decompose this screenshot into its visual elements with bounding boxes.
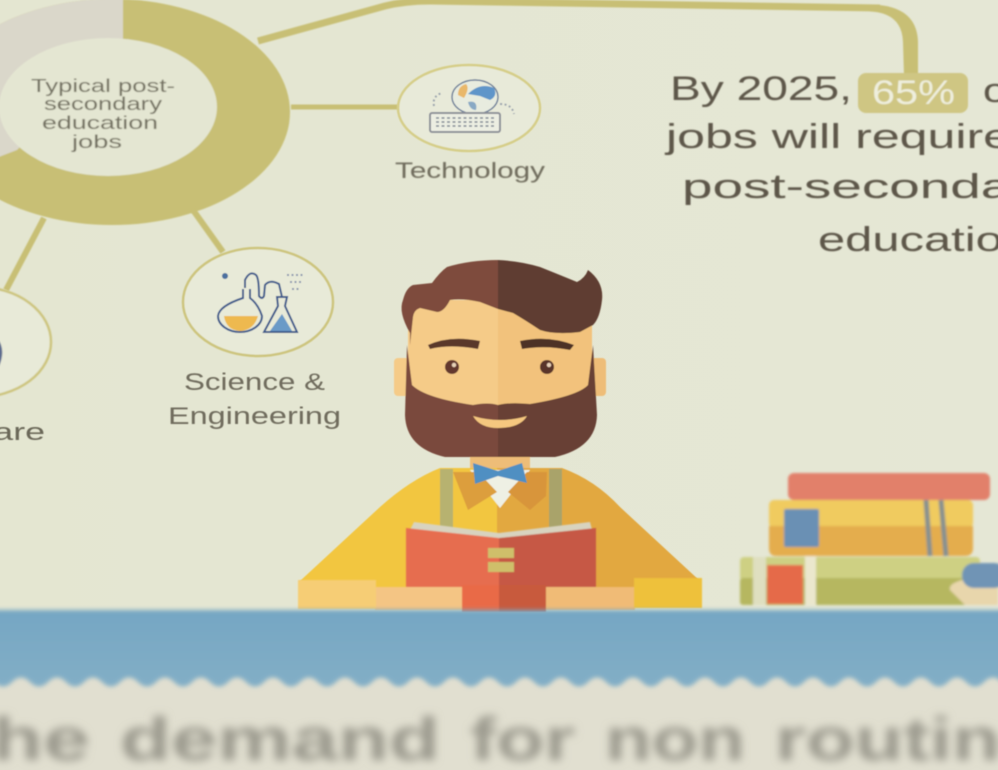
donut chart	[0, 0, 290, 225]
icon: science and engineering	[183, 248, 333, 356]
book spine	[462, 585, 499, 612]
label: technology: Technology	[395, 158, 545, 183]
donut label	[31, 76, 175, 152]
keyboard	[430, 113, 500, 132]
beard left	[405, 345, 498, 457]
neck	[470, 445, 530, 475]
beard right	[498, 345, 597, 457]
red book	[788, 473, 990, 500]
shirt	[470, 470, 530, 508]
hands	[375, 587, 470, 610]
label: science and engineering: Engineering	[168, 403, 341, 430]
eyes	[445, 360, 459, 374]
lower band	[0, 670, 998, 770]
open book	[298, 522, 702, 612]
donut label: jobs	[70, 132, 122, 152]
heading	[0, 706, 998, 770]
statistic text: By 2025,	[670, 70, 852, 108]
donut label: secondary	[44, 94, 162, 114]
grey donut segment	[0, 0, 123, 168]
hair left	[402, 260, 498, 345]
face	[408, 300, 592, 445]
character: bearded man reading	[300, 260, 700, 606]
mouth	[473, 416, 527, 428]
highlight pill	[858, 73, 968, 113]
bow tie	[473, 463, 527, 484]
icon: healthcare, partially cropped	[0, 287, 51, 397]
statistic text: 65%	[872, 74, 955, 112]
globe	[452, 80, 498, 114]
donut label: education	[42, 113, 158, 133]
label: science and engineering	[168, 369, 341, 430]
blue banner	[0, 610, 998, 686]
small blue book	[950, 580, 998, 605]
suspenders	[440, 469, 453, 531]
statistic text: education	[818, 221, 998, 259]
statistic text: post-secondary	[682, 168, 998, 206]
collar	[453, 472, 497, 510]
eyebrows	[428, 339, 480, 349]
statistic text	[665, 70, 998, 259]
green book	[740, 557, 980, 581]
label: science and engineering: Science &	[184, 369, 325, 396]
ears	[394, 358, 424, 396]
stacked books	[740, 473, 998, 605]
torso and arms	[300, 468, 497, 606]
notch where connector meets ring	[247, 28, 266, 46]
donut label: Typical post-	[31, 76, 175, 96]
hair right	[498, 260, 602, 333]
yellow book	[769, 500, 973, 528]
donut centre	[0, 38, 217, 176]
cuffs	[298, 580, 376, 609]
statistic text: jobs will require	[665, 118, 998, 156]
icon: technology	[398, 65, 540, 151]
connector lines	[6, 1, 918, 290]
